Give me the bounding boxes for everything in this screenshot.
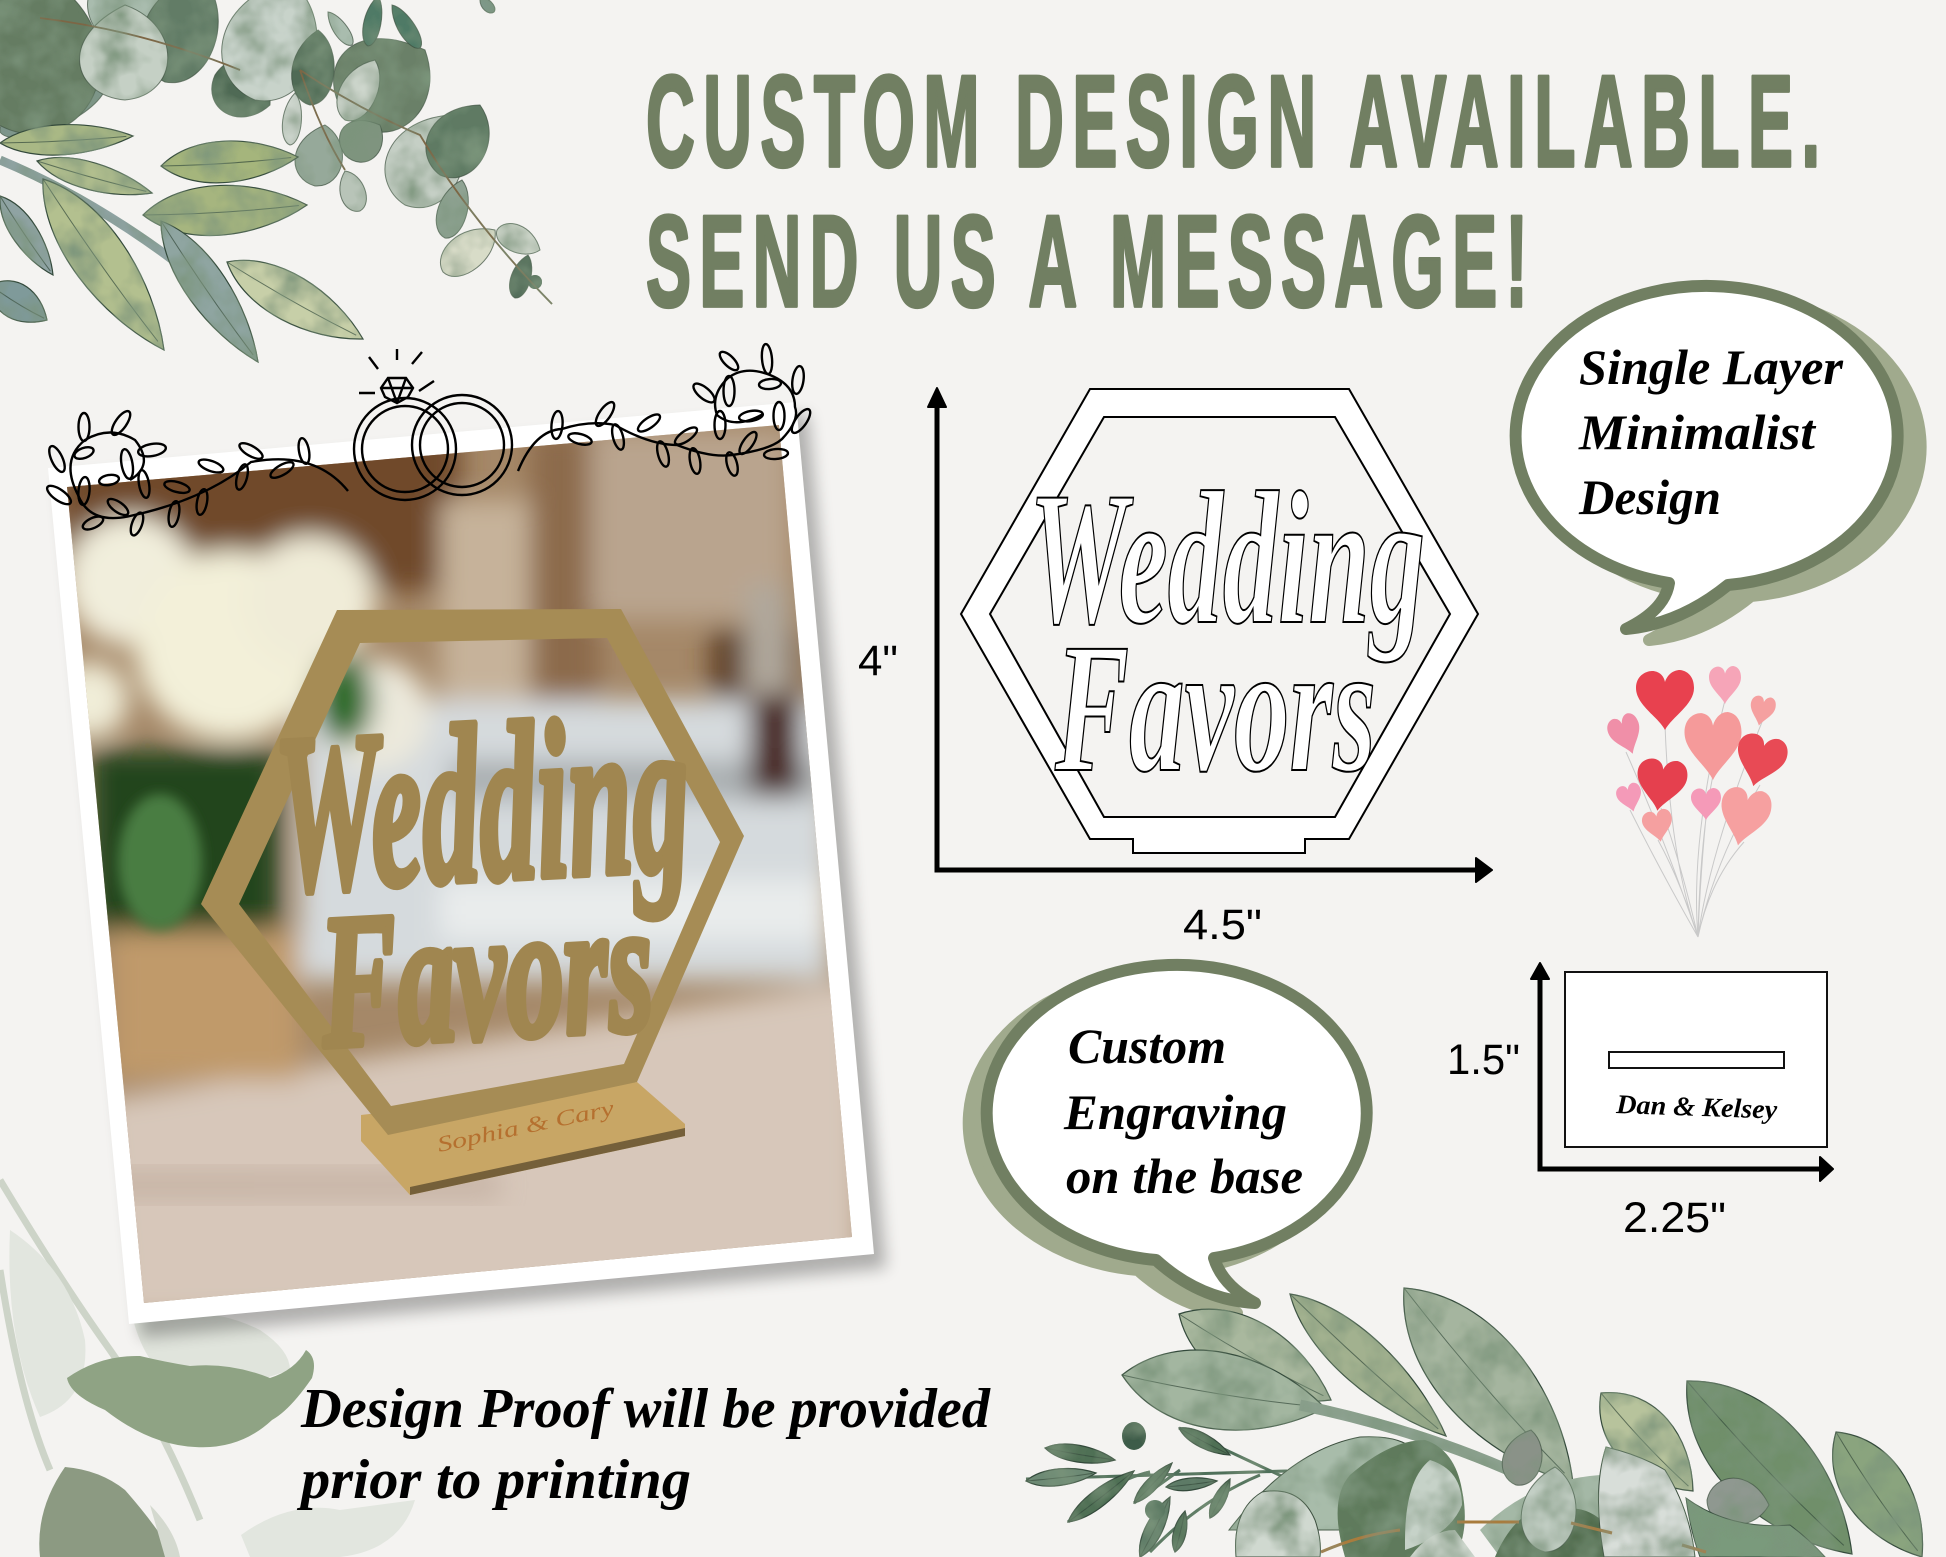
callout text: Engraving xyxy=(1063,1084,1287,1140)
product: wooden base: Sophia & Cary xyxy=(435,1095,616,1157)
hexagon outline xyxy=(961,389,1478,853)
label: height: 4" xyxy=(858,637,898,685)
icon: left vine xyxy=(44,408,348,537)
label: depth: 1.5" xyxy=(1447,1036,1520,1084)
slot xyxy=(1609,1052,1784,1068)
text: design proof note: Design Proof will be provided xyxy=(300,1378,991,1440)
callout text: on the base xyxy=(1066,1148,1303,1204)
callout text xyxy=(1578,339,1844,525)
engraving text: Dan & Kelsey xyxy=(1615,1089,1779,1125)
icon: heart balloons xyxy=(1604,666,1791,937)
panel: product photo xyxy=(48,400,886,1338)
outline lettering: Favors xyxy=(1054,606,1376,811)
base plate xyxy=(1565,972,1827,1147)
title: CUSTOM DESIGN AVAILABLE. xyxy=(646,48,1820,194)
foliage: top left xyxy=(0,0,552,374)
text: design proof note: prior to printing xyxy=(297,1449,691,1511)
outline lettering xyxy=(1029,454,1425,811)
ornament: wedding rings and vines xyxy=(44,344,814,537)
title: SEND US A MESSAGE! xyxy=(646,188,1528,334)
label: width: 4.5" xyxy=(1183,901,1262,949)
callout text: Single Layer xyxy=(1579,339,1844,395)
icon: rings xyxy=(354,349,512,500)
callout text: Minimalist xyxy=(1578,404,1817,460)
product: gold lettering: Wedding xyxy=(270,668,695,939)
callout text: Custom xyxy=(1068,1018,1226,1074)
outline lettering: Wedding xyxy=(1029,454,1425,664)
callout text: Design xyxy=(1578,469,1721,525)
product: gold hexagon sign xyxy=(201,609,744,1135)
text: design proof note xyxy=(297,1378,991,1511)
product: gold lettering xyxy=(270,668,695,1088)
callout: custom engraving xyxy=(969,965,1367,1313)
title xyxy=(646,48,1820,334)
axis arrows xyxy=(1540,968,1825,1169)
callout text xyxy=(1063,1018,1303,1204)
diagram: base dimensions xyxy=(1447,963,1833,1242)
foliage: bottom right xyxy=(1025,1259,1946,1557)
product: gold lettering: Favors xyxy=(315,861,658,1088)
icon: right vine xyxy=(518,344,814,477)
product: wooden base xyxy=(361,1082,685,1195)
callout: single layer xyxy=(1516,286,1921,640)
diagram: hexagon dimensions xyxy=(858,388,1492,949)
foliage: bottom left xyxy=(0,1180,415,1557)
axis arrows xyxy=(937,396,1480,870)
label: length: 2.25" xyxy=(1623,1194,1726,1242)
